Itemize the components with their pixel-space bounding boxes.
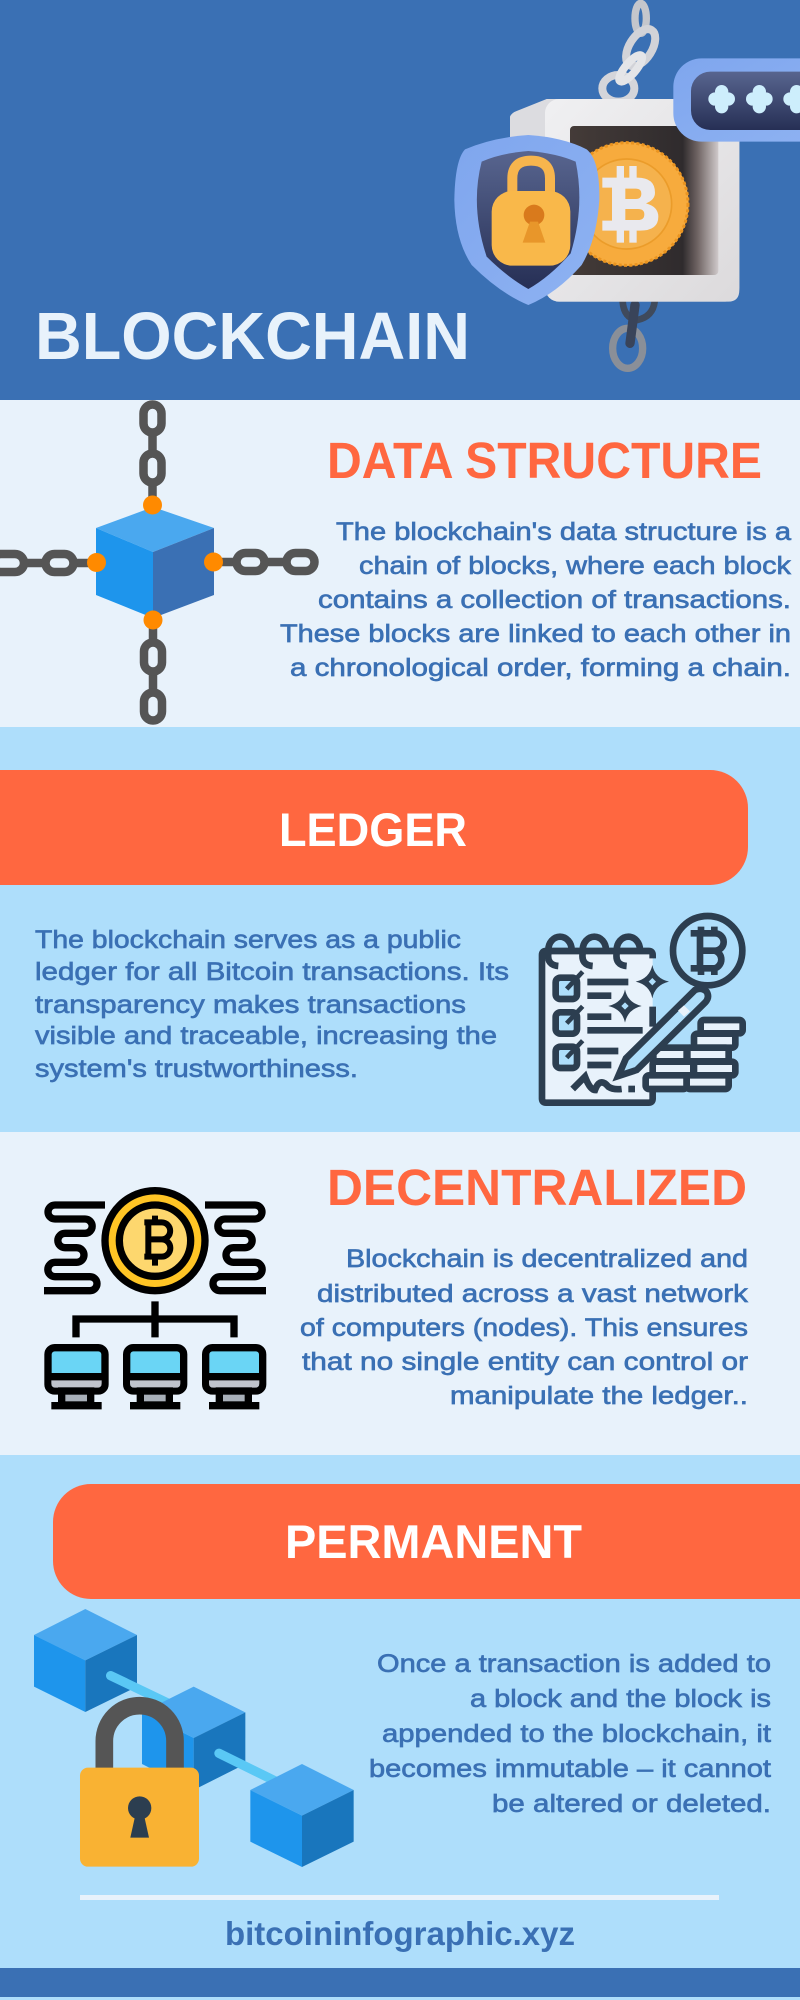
text block: Once a transaction is added to xyxy=(377,1650,771,1678)
text block xyxy=(280,518,792,682)
text block: manipulate the ledger.. xyxy=(450,1382,748,1410)
text block xyxy=(369,1650,771,1818)
panel: decentralized xyxy=(0,1132,800,1455)
panel: ledger xyxy=(0,727,800,1132)
heading bar: PERMANENT xyxy=(285,1515,582,1568)
text block: The blockchain's data structure is a xyxy=(336,518,791,546)
text block: appended to the blockchain, it xyxy=(382,1720,771,1748)
panel: header xyxy=(0,0,800,400)
text block: The blockchain serves as a public xyxy=(35,926,461,954)
text block: Blockchain is decentralized and xyxy=(346,1245,748,1273)
text block: visible and traceable, increasing the xyxy=(35,1022,497,1050)
panel: data structure xyxy=(0,400,800,727)
heading: DATA STRUCTURE xyxy=(327,432,762,489)
text block: transparency makes transactions xyxy=(35,991,466,1019)
icon: safe with bitcoin, shield and password xyxy=(454,3,800,368)
icon: bitcoin network xyxy=(44,1191,266,1406)
text block: system's trustworthiness. xyxy=(35,1055,358,1083)
panel: permanent xyxy=(0,1455,800,1968)
text block: contains a collection of transactions. xyxy=(318,586,791,614)
icon: locked chain of blocks xyxy=(34,1609,354,1867)
text block: that no single entity can control or xyxy=(302,1348,748,1376)
text block xyxy=(35,926,509,1083)
title: BLOCKCHAIN xyxy=(35,299,470,374)
text block: These blocks are linked to each other in xyxy=(280,620,791,648)
icon: cube with four chains xyxy=(0,404,314,720)
text block: ledger for all Bitcoin transactions. Its xyxy=(35,958,509,986)
footer bar xyxy=(0,1968,800,1997)
heading bar xyxy=(53,1484,800,1599)
heading: DECENTRALIZED xyxy=(327,1159,747,1216)
text block: be altered or deleted. xyxy=(492,1790,771,1818)
text block: distributed across a vast network xyxy=(317,1280,749,1308)
text block: chain of blocks, where each block xyxy=(359,552,792,580)
text block: a chronological order, forming a chain. xyxy=(290,654,791,682)
text block xyxy=(300,1245,749,1410)
text block: of computers (nodes). This ensures xyxy=(300,1314,748,1342)
text block: becomes immutable – it cannot xyxy=(369,1755,771,1783)
text block: a block and the block is xyxy=(470,1685,771,1713)
icon: ledger notepad, pen and coins xyxy=(542,916,743,1103)
heading bar xyxy=(0,770,748,885)
heading bar: LEDGER xyxy=(279,803,467,856)
footer url: bitcoininfographic.xyz xyxy=(225,1915,575,1952)
